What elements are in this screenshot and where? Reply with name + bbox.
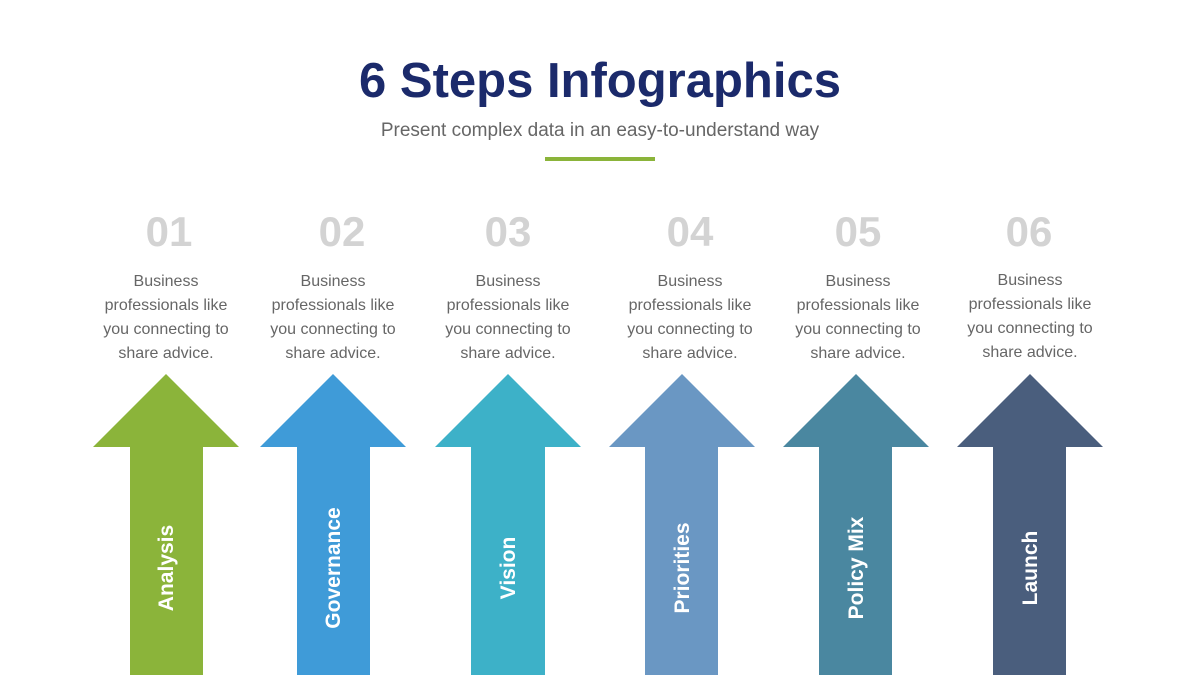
- text 04: share advice.: [642, 345, 738, 362]
- number 05: 05: [835, 208, 881, 255]
- number 02: 02: [319, 208, 365, 255]
- text 03: share advice.: [460, 345, 556, 362]
- arrow: Policy Mix: Policy Mix: [845, 516, 868, 619]
- text 03: Business: [476, 273, 540, 290]
- text 06: [967, 272, 1093, 361]
- text 06: you connecting to: [967, 320, 1093, 337]
- arrow: Priorities: [609, 374, 755, 675]
- text 04: Business: [658, 273, 722, 290]
- arrow: Launch: Launch: [1019, 531, 1042, 605]
- text 02: share advice.: [285, 345, 381, 362]
- text 03: professionals like: [447, 297, 569, 314]
- number 01: 01: [146, 208, 192, 255]
- text 01: you connecting to: [103, 321, 229, 338]
- text 05: [795, 273, 921, 362]
- arrow: Priorities: Priorities: [671, 522, 694, 614]
- text 01: share advice.: [118, 345, 214, 362]
- text 02: Business: [301, 273, 365, 290]
- text 04: professionals like: [629, 297, 751, 314]
- text 01: professionals like: [105, 297, 227, 314]
- text 02: [270, 273, 396, 362]
- text 05: you connecting to: [795, 321, 921, 338]
- text 01: [103, 273, 229, 362]
- text 05: professionals like: [797, 297, 919, 314]
- text 02: professionals like: [272, 297, 394, 314]
- number 06: 06: [1006, 208, 1052, 255]
- subtitle: Present complex data in an easy-to-understand way: [381, 120, 819, 141]
- text 04: [627, 273, 753, 362]
- title: 6 Steps Infographics: [359, 54, 841, 108]
- arrow: Analysis: Analysis: [155, 525, 178, 611]
- text 06: professionals like: [969, 296, 1091, 313]
- text 02: you connecting to: [270, 321, 396, 338]
- text 05: share advice.: [810, 345, 906, 362]
- number 03: 03: [485, 208, 531, 255]
- text 04: you connecting to: [627, 321, 753, 338]
- arrow: Governance: [260, 374, 406, 675]
- divider accent: [545, 157, 655, 161]
- text 01: Business: [134, 273, 198, 290]
- arrow: Policy Mix: [783, 374, 929, 675]
- text 06: Business: [998, 272, 1062, 289]
- arrow: Analysis: [93, 374, 239, 675]
- step numbers and descriptions: [103, 208, 1093, 362]
- arrow: Launch: [957, 374, 1103, 675]
- number 04: 04: [667, 208, 713, 255]
- arrow: Governance: Governance: [322, 507, 345, 629]
- arrow: Vision: [435, 374, 581, 675]
- text 03: you connecting to: [445, 321, 571, 338]
- arrow: Vision: Vision: [497, 537, 520, 599]
- text 05: Business: [826, 273, 890, 290]
- text 03: [445, 273, 571, 362]
- text 06: share advice.: [982, 344, 1078, 361]
